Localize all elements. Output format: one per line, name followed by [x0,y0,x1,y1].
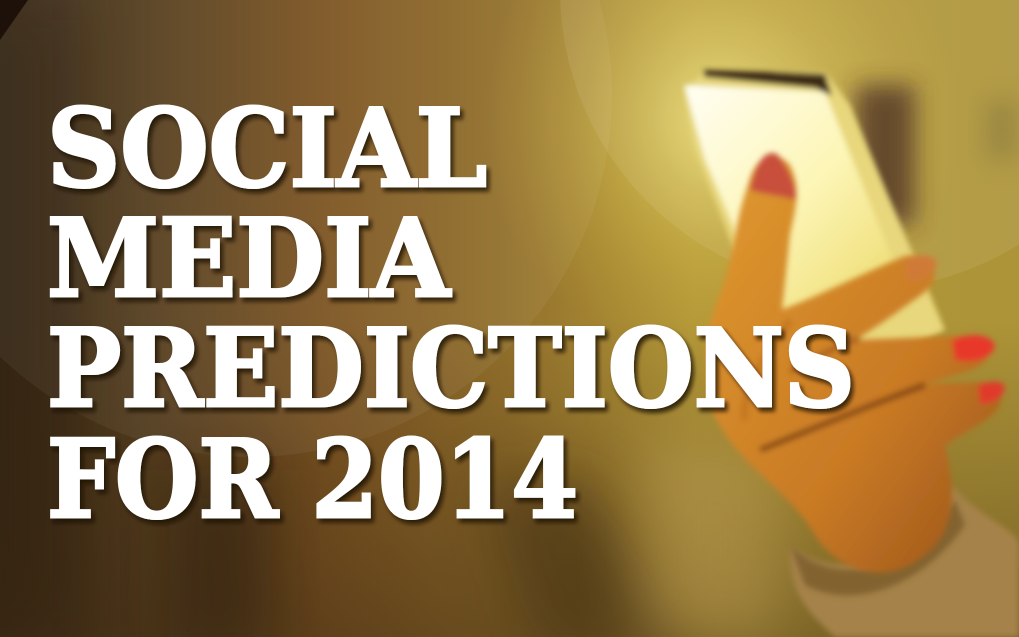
photo: hand holding phone [684,70,1019,637]
phone [684,70,945,350]
decorative overlapping circles [0,0,1019,457]
dark corner shape at top left [0,0,28,40]
title: PREDICTIONS [47,306,855,432]
hand [706,153,1005,572]
sleeve [790,485,1019,637]
title: SOCIAL [47,86,487,212]
title [47,86,855,543]
title: MEDIA [47,196,452,322]
fingernails [750,153,796,200]
title: FOR 2014 [47,417,578,543]
